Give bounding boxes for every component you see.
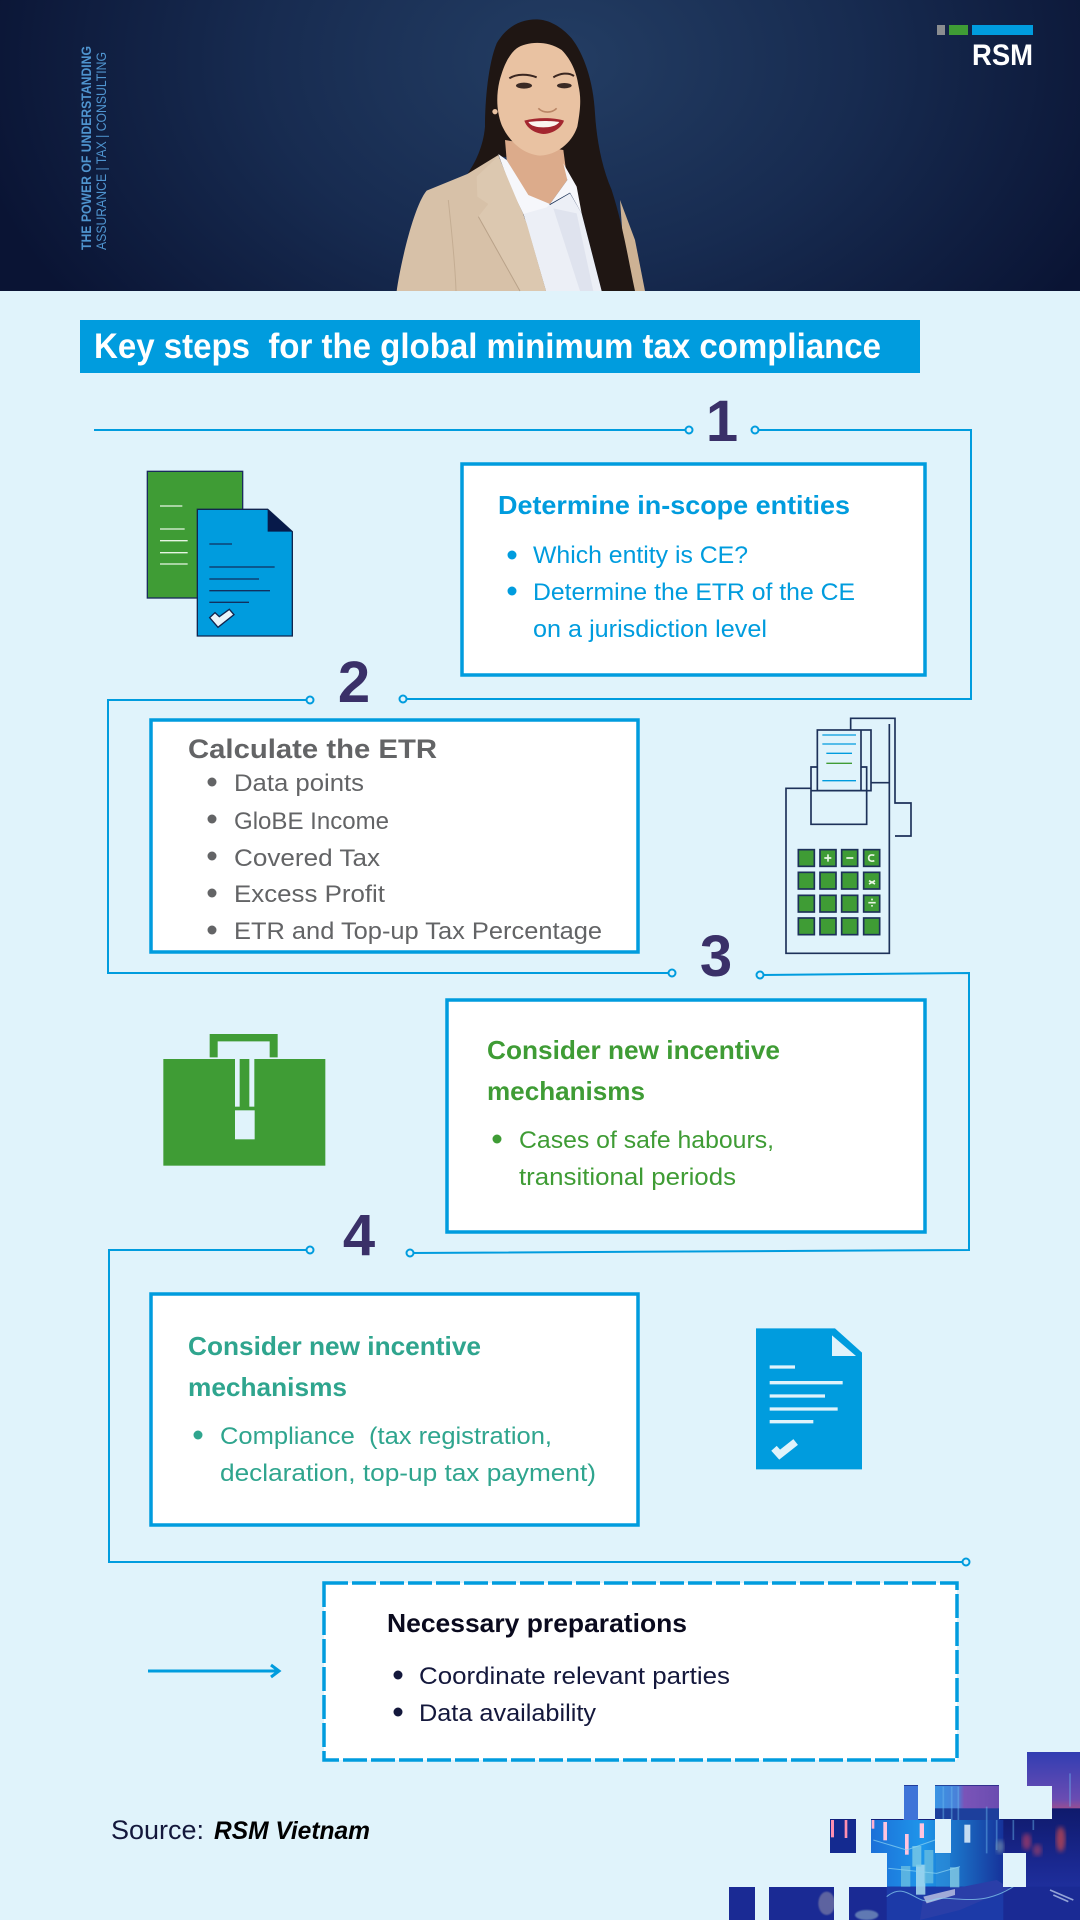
bullet list: Covered Tax bbox=[234, 845, 380, 872]
heading: Necessary preparations bbox=[387, 1608, 687, 1638]
connector path 2 to 3 bbox=[108, 696, 969, 1256]
heading: mechanisms bbox=[487, 1076, 645, 1106]
step number 1: 1 bbox=[706, 389, 738, 454]
panel: consider new incentive mechanisms (teal) bbox=[151, 1294, 638, 1525]
bullet list: GloBE Income bbox=[234, 808, 389, 835]
icon: calculator bbox=[786, 718, 911, 953]
connector path 1 to 2 bbox=[94, 426, 971, 702]
bullet list: on a jurisdiction level bbox=[533, 616, 767, 643]
connector path 4 to preparations bbox=[109, 1246, 970, 1566]
icon: documents bbox=[147, 471, 292, 636]
bullet list bbox=[394, 1663, 730, 1727]
source note: RSM Vietnam bbox=[214, 1817, 370, 1845]
arrow bbox=[148, 1665, 279, 1677]
panel: calculate the ETR bbox=[151, 720, 638, 952]
bullet list: Data availability bbox=[419, 1700, 596, 1727]
heading: mechanisms bbox=[188, 1372, 347, 1402]
bullet list: Determine the ETR of the CE bbox=[533, 579, 855, 606]
portrait photo of woman bbox=[397, 19, 645, 291]
panel: necessary preparations bbox=[324, 1583, 957, 1760]
bullet list: transitional periods bbox=[519, 1164, 736, 1191]
decorative city mosaic bbox=[720, 1740, 1080, 1920]
heading: Determine in-scope entities bbox=[498, 490, 850, 520]
step number 4: 4 bbox=[343, 1203, 375, 1268]
bullet list bbox=[194, 1423, 596, 1487]
tagline vertical bbox=[78, 46, 109, 250]
bullet list bbox=[508, 542, 855, 643]
heading: Consider new incentive bbox=[487, 1035, 780, 1065]
bullet list: Coordinate relevant parties bbox=[419, 1663, 730, 1690]
bullet list bbox=[492, 1127, 774, 1191]
bullet list: declaration, top-up tax payment) bbox=[220, 1460, 596, 1487]
heading: Calculate the ETR bbox=[188, 734, 437, 764]
panel: consider new incentive mechanisms (green) bbox=[447, 1000, 925, 1232]
icon: document with check bbox=[756, 1328, 862, 1469]
header banner bbox=[0, 0, 1080, 291]
source note: Source: bbox=[111, 1815, 204, 1845]
heading: Consider new incentive bbox=[188, 1331, 481, 1361]
title bar: Key steps for the global minimum tax compliance bbox=[94, 327, 881, 366]
tagline vertical: THE POWER OF UNDERSTANDING bbox=[78, 46, 94, 250]
bullet list: Excess Profit bbox=[234, 881, 385, 908]
bullet list: Data points bbox=[234, 770, 364, 797]
RSM logo: RSM bbox=[972, 39, 1033, 72]
bullet list bbox=[208, 770, 602, 945]
bullet list: Which entity is CE? bbox=[533, 542, 748, 569]
bullet list: ETR and Top-up Tax Percentage bbox=[234, 918, 602, 945]
tagline vertical: ASSURANCE | TAX | CONSULTING bbox=[93, 52, 109, 250]
RSM logo bbox=[937, 25, 1033, 72]
icon: briefcase bbox=[163, 1034, 325, 1166]
bullet list: Compliance (tax registration, bbox=[220, 1423, 552, 1450]
step number 2: 2 bbox=[338, 650, 370, 715]
source note bbox=[111, 1815, 370, 1845]
step number 3: 3 bbox=[700, 924, 732, 989]
panel: determine in-scope entities bbox=[462, 464, 925, 675]
bullet list: Cases of safe habours, bbox=[519, 1127, 774, 1154]
